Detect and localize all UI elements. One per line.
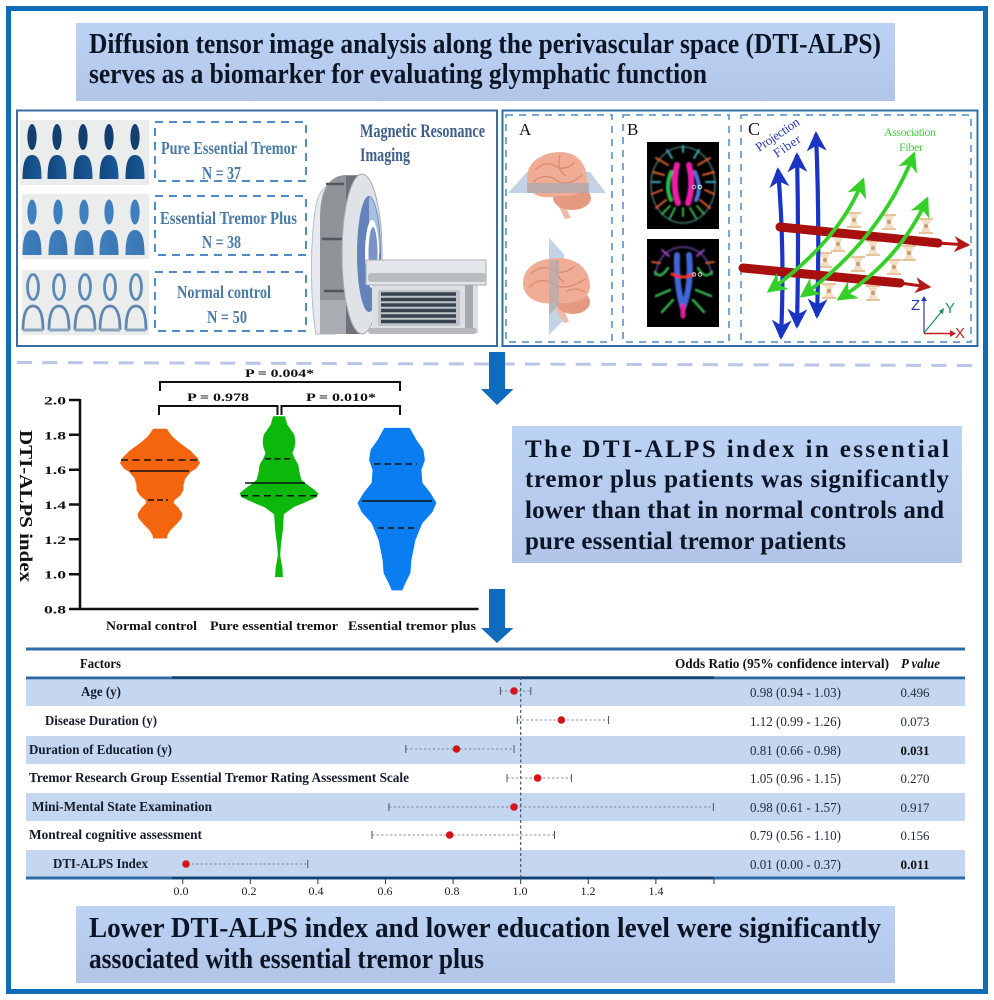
forest estimates <box>182 687 713 868</box>
significance brackets: P = 0.004* <box>245 366 314 380</box>
factor labels: Tremor Research Group Essential Tremor Rating Assessment Scale <box>29 770 409 785</box>
sub-panel A: brain planes <box>506 115 612 342</box>
icon: MRI scanner <box>312 174 486 334</box>
p values: 0.270 <box>900 771 930 786</box>
factor labels: Montreal cognitive assessment <box>29 827 202 842</box>
violin plot <box>16 366 478 633</box>
axes <box>911 296 965 342</box>
axes: Y <box>945 300 955 317</box>
axes and tick labels: 0.8 <box>44 602 66 616</box>
label: association fiber: Association <box>884 125 936 139</box>
axes: Z <box>911 297 920 314</box>
forest plot table <box>26 649 965 898</box>
conclusion banner: associated with essential tremor plus <box>89 944 484 975</box>
sub-panel B: DTI colour maps <box>623 115 729 342</box>
factor labels: Disease Duration (y) <box>45 713 157 728</box>
group label: normal control <box>155 272 306 331</box>
odds ratio values: 0.98 (0.61 - 1.57) <box>750 800 841 815</box>
significance brackets: P = 0.010* <box>306 390 376 404</box>
title banner <box>76 23 895 101</box>
forest x-axis: 0.0 <box>174 884 188 898</box>
forest x-axis: 1.2 <box>580 884 596 898</box>
perivascular motifs <box>818 213 933 300</box>
axes: X <box>955 325 965 342</box>
icon: brain with axial plane <box>508 152 606 219</box>
p values: 0.917 <box>900 800 930 815</box>
image: axial colour map <box>647 142 719 229</box>
MRI heading <box>360 121 485 166</box>
forest x-axis: 0.6 <box>378 884 392 898</box>
reference line <box>520 677 522 878</box>
y-axis title: DTI-ALPS index <box>16 430 36 582</box>
p values: 0.073 <box>900 714 930 729</box>
group label: essential tremor plus: N = 38 <box>202 232 241 252</box>
icon: brain with coronal plane <box>523 238 590 335</box>
MRI heading: Imaging <box>360 145 410 166</box>
axes and tick labels: 1.8 <box>44 428 66 442</box>
panel: DTI-ALPS method <box>502 110 978 346</box>
sub-panel B: DTI colour maps: B <box>627 120 638 139</box>
results callout: tremor plus patients was significantly <box>525 466 950 493</box>
factor labels: Mini-Mental State Examination <box>32 799 212 814</box>
group label: essential tremor plus: Essential Tremor Plus <box>160 208 297 228</box>
odds ratio values: 1.05 (0.96 - 1.15) <box>750 771 841 786</box>
p values: 0.496 <box>900 685 930 700</box>
axes and tick labels: 1.6 <box>44 463 66 477</box>
factor labels <box>29 684 409 871</box>
forest x-axis: 0.4 <box>308 884 324 898</box>
forest x-axis: 0.8 <box>444 884 460 898</box>
table header <box>80 656 940 671</box>
significance brackets <box>159 366 400 415</box>
title banner: Diffusion tensor image analysis along the perivascular space (DTI-ALPS) <box>89 29 881 60</box>
label: association fiber: Fiber <box>899 140 923 154</box>
arrow: down to results <box>481 352 514 405</box>
table header: Odds Ratio (95% confidence interval) <box>675 656 889 671</box>
conclusion banner <box>76 906 895 983</box>
odds ratio values: 0.98 (0.94 - 1.03) <box>750 685 841 700</box>
sub-panel C: fibre diagram <box>741 114 971 342</box>
factor labels: Duration of Education (y) <box>29 742 172 757</box>
violin: pure essential tremor <box>240 417 318 577</box>
label: projection fiber: Projection <box>752 114 803 154</box>
odds ratio values: 0.01 (0.00 - 0.37) <box>750 857 841 872</box>
category labels: Pure essential tremor <box>210 618 338 633</box>
results callout <box>512 426 962 563</box>
conclusion banner: Lower DTI-ALPS index and lower education level were significantly <box>89 913 881 944</box>
category labels: Essential tremor plus <box>348 618 476 633</box>
results callout: The DTI-ALPS index in essential <box>525 436 949 463</box>
axes and tick labels: 2.0 <box>44 394 66 408</box>
odds ratio values: 1.12 (0.99 - 1.26) <box>750 714 841 729</box>
odds ratio values: 0.79 (0.56 - 1.10) <box>750 828 841 843</box>
panel: study groups and MRI <box>17 110 497 346</box>
table header: P value <box>901 656 940 671</box>
title banner: serves as a biomarker for evaluating glymphatic function <box>89 59 707 90</box>
label: projection fiber: Fiber <box>770 131 804 160</box>
group icons: normal control <box>22 270 149 335</box>
group label: normal control: Normal control <box>177 282 271 302</box>
group label: essential tremor plus <box>155 196 306 255</box>
group label: pure essential tremor: N = 37 <box>202 163 241 183</box>
axes and tick labels: 1.0 <box>44 568 66 582</box>
table header: Factors <box>80 656 121 671</box>
label: association fiber <box>884 125 936 154</box>
forest x-axis <box>174 879 714 898</box>
factor labels: DTI-ALPS Index <box>53 856 148 871</box>
odds ratio values: 0.81 (0.66 - 0.98) <box>750 743 841 758</box>
red perivascular tubes <box>743 227 968 287</box>
sub-panel A: brain planes: A <box>519 120 532 139</box>
axes and tick labels: 1.4 <box>44 498 66 512</box>
forest x-axis: 0.2 <box>242 884 256 898</box>
category labels <box>106 618 476 633</box>
association fibre arrows <box>769 154 927 299</box>
group label: pure essential tremor <box>155 122 306 183</box>
significance brackets: P = 0.978 <box>187 390 249 404</box>
group icons: pure essential tremor <box>20 120 149 185</box>
p values: 0.156 <box>900 828 930 843</box>
group icons: essential tremor plus <box>22 194 149 259</box>
image: coronal colour map <box>647 239 719 327</box>
axes and tick labels: 1.2 <box>44 533 66 547</box>
results callout: lower than that in normal controls and <box>525 497 944 524</box>
MRI heading: Magnetic Resonance <box>360 121 485 142</box>
table bands <box>26 649 965 878</box>
group label: pure essential tremor: Pure Essential Tremor <box>161 138 297 158</box>
forest x-axis: 1.4 <box>648 884 664 898</box>
arrow: down to regression <box>481 589 514 643</box>
p values: 0.011 <box>900 857 930 872</box>
group label: normal control: N = 50 <box>207 307 247 327</box>
violin: essential tremor plus <box>358 428 436 590</box>
results callout: pure essential tremor patients <box>525 528 846 555</box>
projection fibre arrows <box>778 134 818 337</box>
odds ratio values <box>750 685 841 872</box>
p values <box>900 685 930 872</box>
axes and tick labels <box>44 394 478 616</box>
category labels: Normal control <box>106 618 197 633</box>
sub-panel C: fibre diagram: C <box>748 119 760 139</box>
p values: 0.031 <box>900 743 930 758</box>
forest x-axis: 1.0 <box>512 884 528 898</box>
factor labels: Age (y) <box>81 684 121 699</box>
violin: normal control <box>120 429 200 538</box>
